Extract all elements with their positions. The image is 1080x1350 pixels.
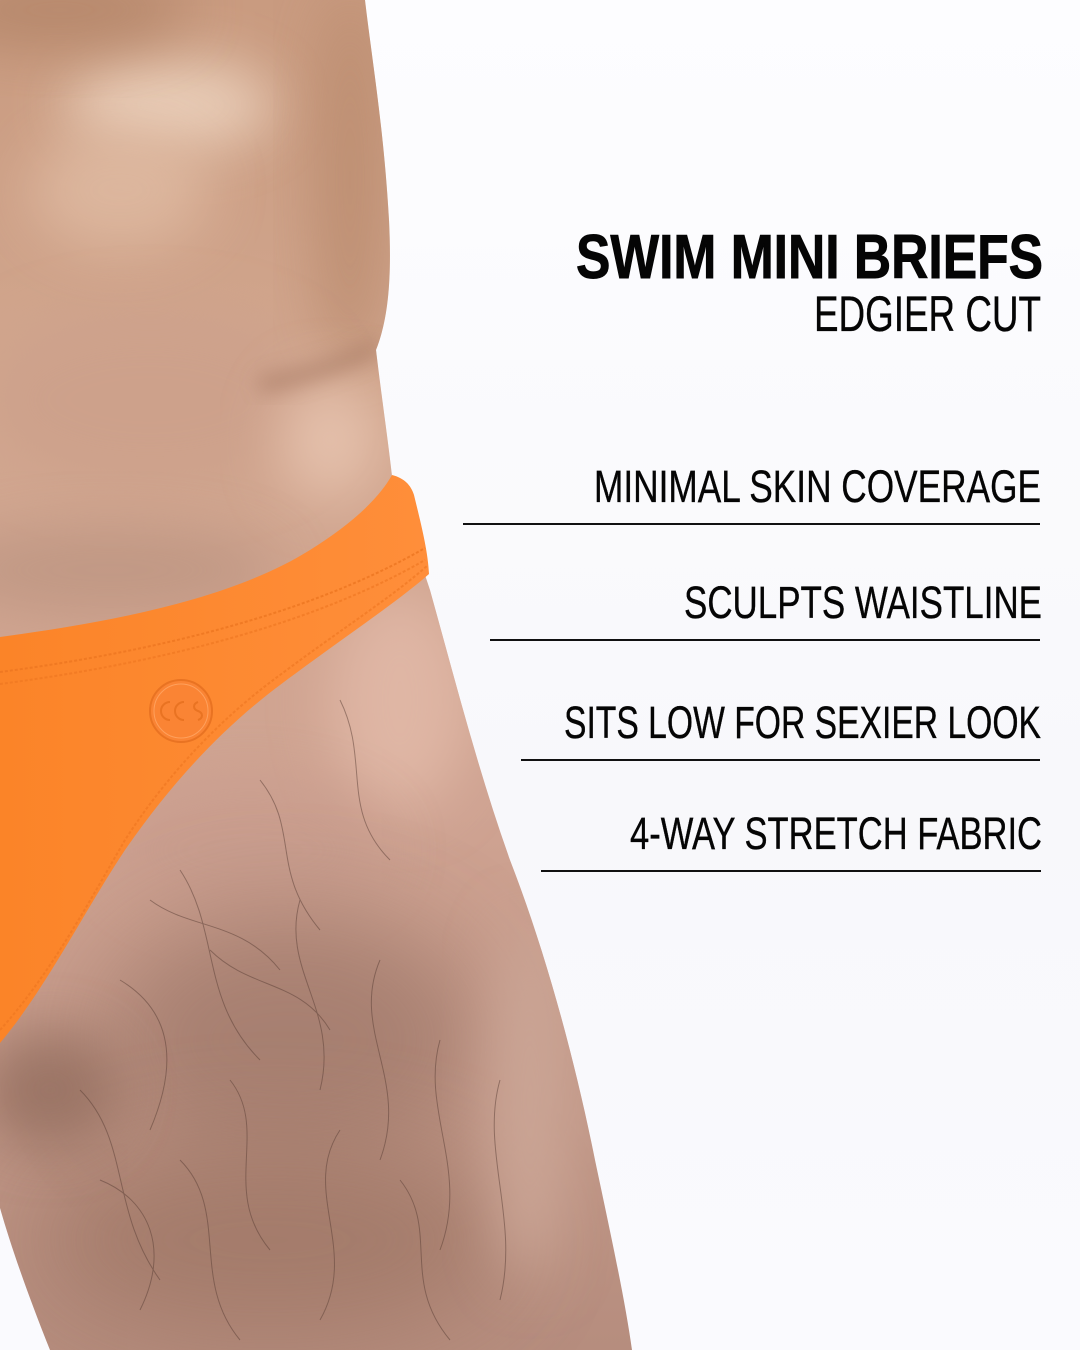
garment: orange swim brief xyxy=(0,475,429,1043)
heading xyxy=(576,223,1043,342)
illustration: torso and thigh xyxy=(0,0,700,1350)
icon: round logo badge xyxy=(150,680,212,742)
garment seam xyxy=(0,548,425,672)
feature list xyxy=(463,461,1042,872)
leg hair strokes xyxy=(80,700,506,1340)
